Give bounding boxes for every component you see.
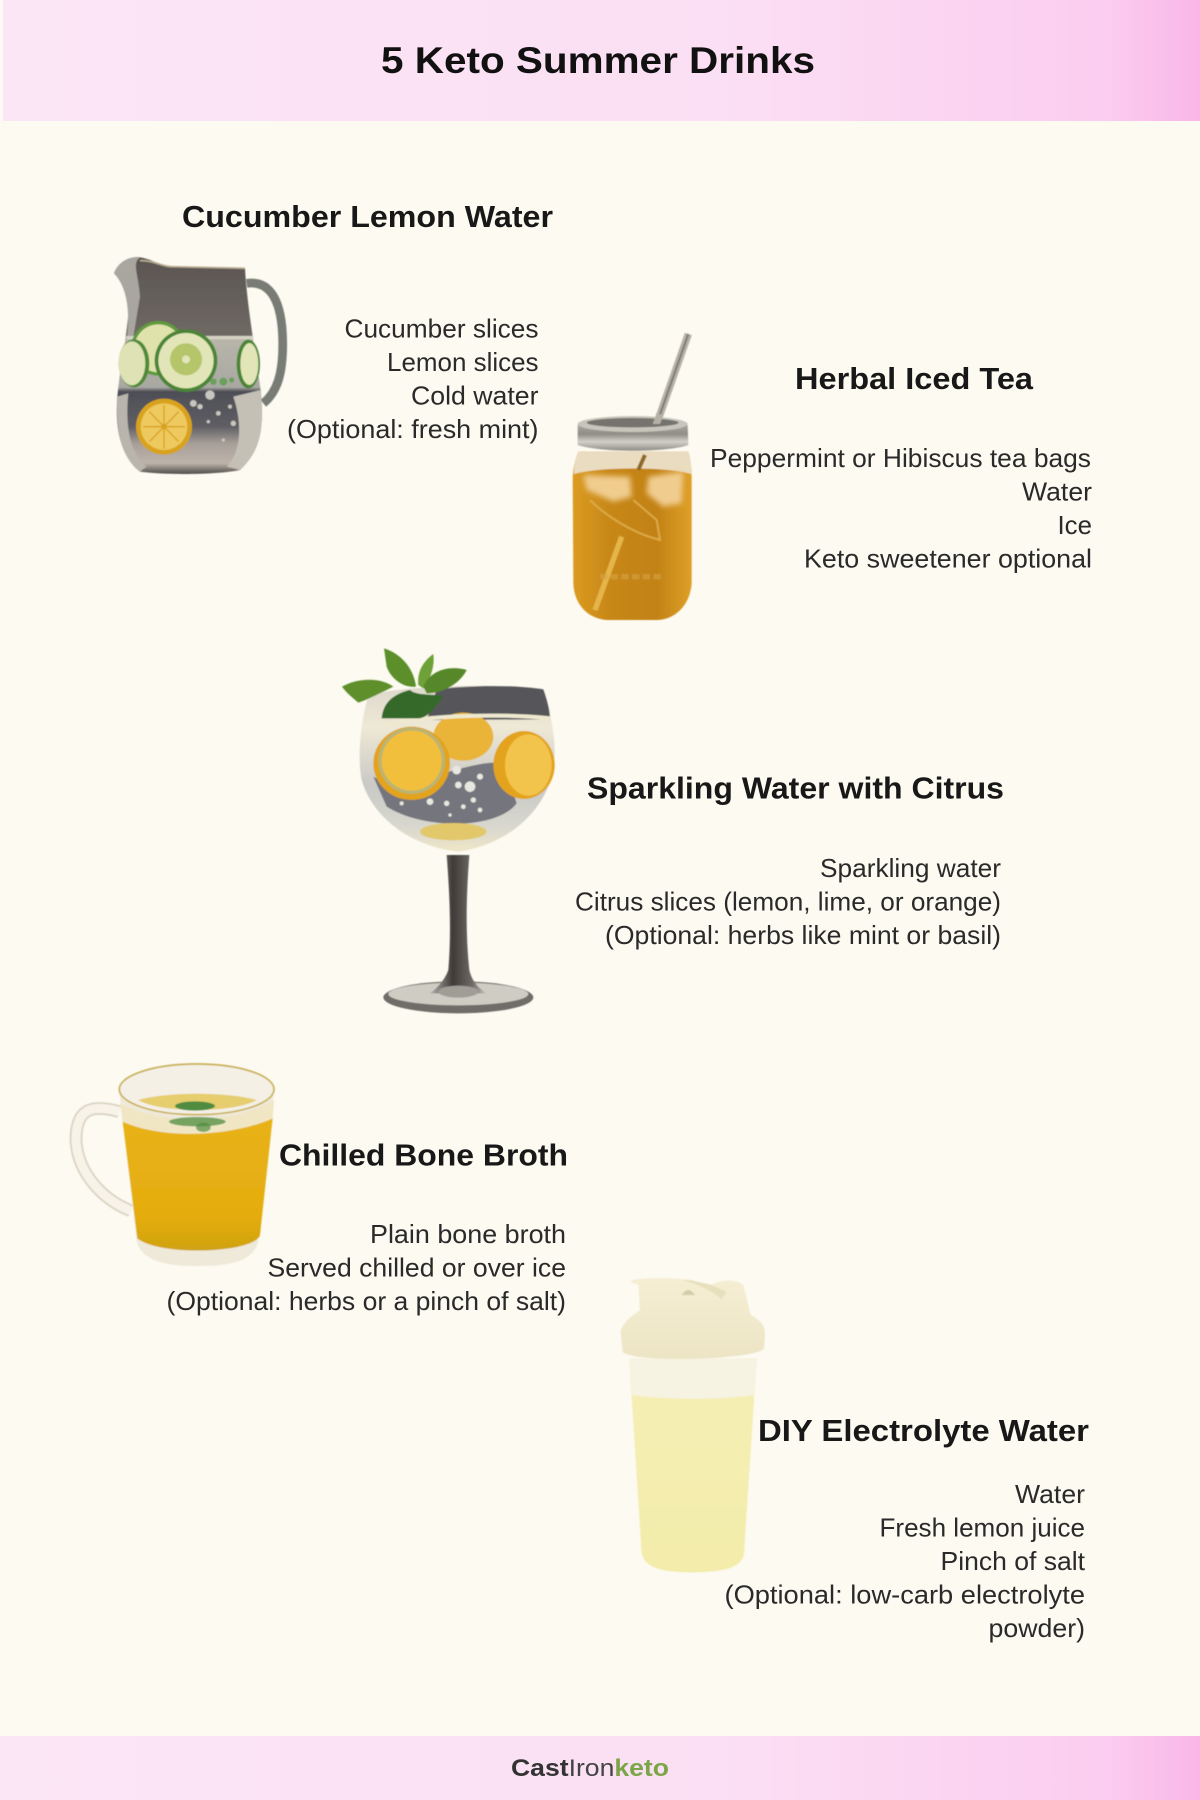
ingredient list: cucumber lemon water: Cold water: [411, 380, 539, 410]
ingredient list: herbal iced tea: Peppermint or Hibiscus tea bags: [710, 443, 1091, 473]
ingredient list: cucumber lemon water: Lemon slices: [387, 347, 538, 377]
ingredient list: diy electrolyte water: Water: [1015, 1479, 1085, 1509]
ingredient list: chilled bone broth: Plain bone broth: [370, 1219, 566, 1249]
icon: citrus goblet with mint: [342, 648, 555, 1013]
ingredient list: herbal iced tea: Water: [1022, 476, 1092, 506]
footer logo: CastIronketo: CastIronketo: [511, 1755, 669, 1782]
ingredient list: chilled bone broth: Served chilled or over ice: [268, 1252, 566, 1282]
ingredient list: diy electrolyte water: Pinch of salt: [940, 1546, 1086, 1576]
title: 5 Keto Summer Drinks: [381, 40, 815, 81]
header band: [3, 0, 1200, 121]
panel: cucumber lemon water: [114, 199, 553, 474]
ingredient list: chilled bone broth: [166, 1219, 566, 1316]
ingredient list: cucumber lemon water: [287, 314, 539, 444]
footer band: [0, 1736, 1200, 1800]
ingredient list: sparkling water with citrus: Citrus slices (lemon, lime, or orange): [575, 886, 1001, 916]
ingredient list: herbal iced tea: Keto sweetener optional: [804, 544, 1092, 574]
heading: chilled bone broth: Chilled Bone Broth: [279, 1138, 568, 1172]
heading: sparkling water with citrus: Sparkling Water with Citrus: [587, 770, 1004, 806]
ingredient list: sparkling water with citrus: (Optional: herbs like mint or basil): [605, 920, 1001, 950]
panel: chilled bone broth: [76, 1064, 568, 1316]
ingredient list: cucumber lemon water: (Optional: fresh mint): [287, 414, 538, 444]
ingredient list: chilled bone broth: (Optional: herbs or a pinch of salt): [166, 1286, 566, 1316]
ingredient list: sparkling water with citrus: [575, 853, 1001, 950]
panel: sparkling water with citrus: [342, 648, 1004, 1013]
ingredient list: herbal iced tea: [710, 443, 1092, 574]
icon: glass mug of broth: [76, 1064, 274, 1266]
ingredient list: diy electrolyte water: Fresh lemon juice: [880, 1512, 1085, 1542]
panel: diy electrolyte water: [621, 1278, 1089, 1643]
ingredient list: diy electrolyte water: powder): [988, 1613, 1085, 1643]
ingredient list: diy electrolyte water: [724, 1479, 1086, 1643]
heading: cucumber lemon water: Cucumber Lemon Water: [182, 199, 553, 234]
ingredient list: cucumber lemon water: Cucumber slices: [344, 314, 538, 344]
mint sprig: [342, 648, 467, 718]
icon: mason jar with straw: [573, 334, 692, 620]
panel: herbal iced tea: [573, 334, 1092, 620]
icon: glass pitcher: [114, 257, 283, 474]
heading: herbal iced tea: Herbal Iced Tea: [795, 361, 1034, 396]
ingredient list: herbal iced tea: Ice: [1058, 510, 1092, 540]
ingredient list: sparkling water with citrus: Sparkling water: [820, 853, 1001, 883]
icon: shaker bottle: [621, 1278, 765, 1572]
heading: diy electrolyte water: DIY Electrolyte Water: [758, 1413, 1089, 1448]
ingredient list: diy electrolyte water: (Optional: low-carb electrolyte: [724, 1580, 1085, 1610]
